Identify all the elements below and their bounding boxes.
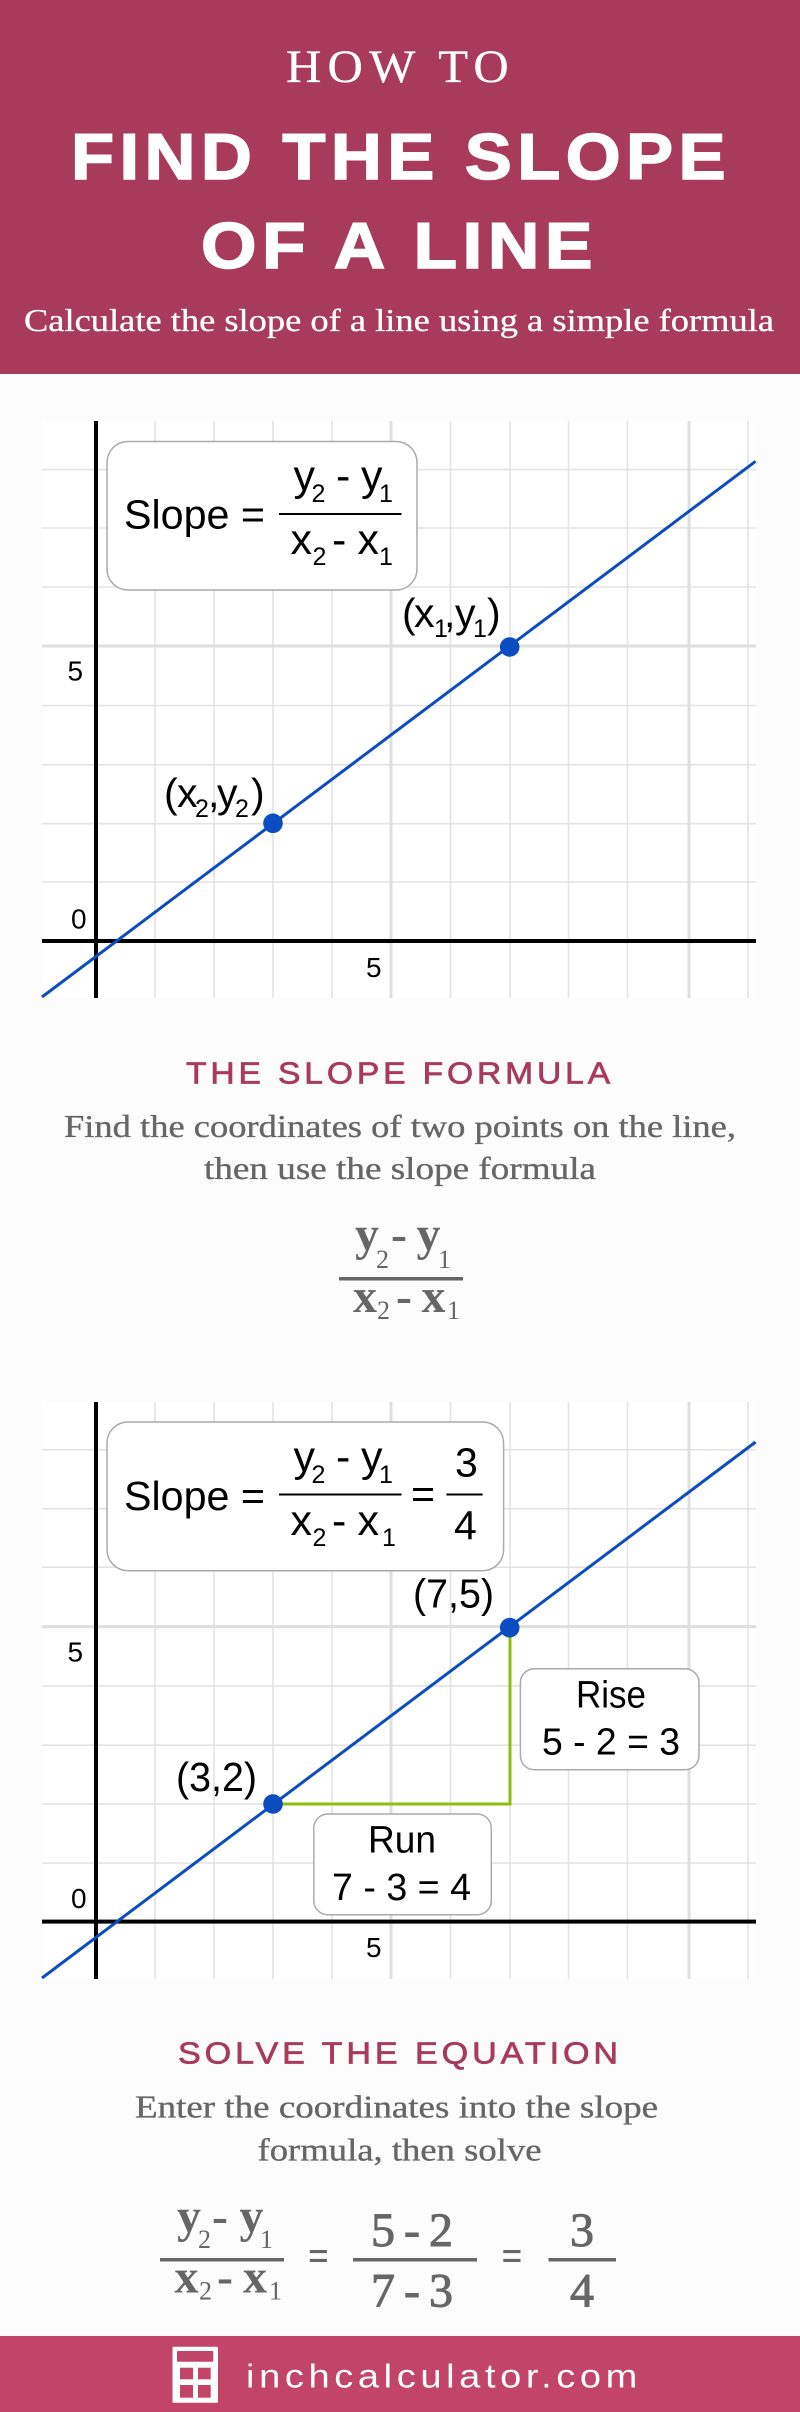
- numerator: -: [391, 1208, 407, 1261]
- result fraction: [446, 1440, 483, 1549]
- worked equation: [160, 2190, 616, 2318]
- axis label y five: 5: [68, 1636, 83, 1668]
- panel: header banner: [0, 0, 800, 374]
- denominator: -: [332, 516, 346, 564]
- y axis: [94, 421, 98, 998]
- formula fraction bar: [160, 2258, 284, 2262]
- description line two: then use the slope formula: [204, 1150, 596, 1186]
- point label x1 y1: (: [402, 590, 416, 636]
- fraction bar: [339, 1277, 463, 1280]
- heading: THE SLOPE FORMULA: [186, 1056, 614, 1090]
- blue line: [42, 461, 756, 997]
- panel: the slope formula: [64, 1056, 736, 1325]
- formula denominator: 1: [269, 2276, 282, 2305]
- x axis: [42, 939, 756, 943]
- formula denominator: 2: [199, 2276, 212, 2305]
- description line one: Enter the coordinates into the slope: [135, 2089, 658, 2125]
- numerator: 1: [438, 1245, 451, 1274]
- denominator: -: [396, 1270, 412, 1323]
- point x2 y2: [263, 814, 283, 833]
- numerator: y: [355, 1208, 379, 1261]
- point label x2 y2: (: [164, 770, 178, 816]
- point label three two: (3,2): [176, 1754, 257, 1800]
- numerator: 2: [312, 1461, 325, 1489]
- point label x1 y1: ,: [444, 590, 455, 636]
- callout: rise: 5 - 2 = 3: [542, 1721, 680, 1763]
- title: line two: OF A LINE: [201, 209, 598, 282]
- callout: run: Run: [368, 1820, 436, 1862]
- denominator: 1: [379, 543, 393, 571]
- denominator: 2: [312, 543, 326, 571]
- formula denominator: -: [217, 2250, 233, 2303]
- run and rise lines: [273, 1628, 510, 1804]
- values numerator: 5 - 2: [371, 2204, 453, 2257]
- point label x2 y2: ): [251, 770, 265, 816]
- numerator: 2: [376, 1245, 389, 1274]
- point label x2 y2: y: [217, 770, 238, 816]
- icon: calculator: [172, 2347, 218, 2403]
- title: line one: FIND THE SLOPE: [71, 120, 731, 193]
- point label x1 y1: x: [414, 590, 435, 636]
- point label x1 y1: ): [487, 590, 501, 636]
- result fraction: 4: [454, 1503, 477, 1549]
- website name: inchcalculator.com: [246, 2357, 642, 2394]
- formula numerator: y: [240, 2190, 264, 2243]
- denominator: x: [353, 1270, 377, 1323]
- numerator: y: [294, 452, 316, 500]
- fraction bar: [279, 513, 402, 515]
- numerator: y: [294, 1433, 316, 1481]
- callout: rise: Rise: [576, 1674, 646, 1716]
- axis label zero: 0: [71, 904, 87, 934]
- denominator: 1: [447, 1296, 460, 1325]
- numerator: y: [361, 1433, 383, 1481]
- result denominator: 4: [570, 2265, 594, 2318]
- denominator: x: [358, 516, 380, 564]
- blue line: [42, 1442, 756, 1978]
- slope label: Slope =: [124, 492, 265, 538]
- axis label x five: 5: [366, 952, 382, 983]
- y axis: [94, 1402, 98, 1979]
- numerator: -: [336, 1433, 350, 1481]
- formula numerator: 1: [260, 2225, 273, 2254]
- formula numerator: -: [212, 2190, 228, 2243]
- heading: how to: HOW TO: [286, 41, 515, 93]
- point label x2 y2: x: [177, 770, 198, 816]
- denominator: x: [422, 1270, 446, 1323]
- slope label: Slope =: [124, 1473, 265, 1519]
- panel: footer: [0, 2336, 800, 2412]
- equals sign two: =: [502, 2232, 522, 2281]
- result numerator: 3: [570, 2204, 594, 2257]
- point label seven five: (7,5): [413, 1570, 494, 1616]
- point three two: [263, 1794, 283, 1814]
- numerator: y: [416, 1208, 440, 1261]
- denominator: x: [290, 1497, 312, 1545]
- denominator: x: [290, 516, 312, 564]
- callout: run: [314, 1814, 491, 1915]
- axis label y five: 5: [68, 656, 83, 687]
- axis label x five: 5: [366, 1932, 382, 1963]
- panel: graph with worked example: [42, 1402, 756, 1979]
- callout: slope formula: [107, 442, 417, 590]
- panel: graph with slope formula: [42, 421, 756, 998]
- callout: rise: [520, 1669, 699, 1770]
- result fraction: 3: [455, 1440, 478, 1486]
- point seven five: [500, 1618, 520, 1637]
- axis label zero: 0: [71, 1883, 87, 1914]
- subtitle: Calculate the slope of a line using a simple formula: [24, 302, 774, 338]
- denominator: -: [332, 1497, 346, 1545]
- numerator: 2: [312, 480, 325, 508]
- formula numerator: y: [177, 2190, 201, 2243]
- fraction bar: [279, 1494, 402, 1496]
- numerator: 1: [379, 480, 393, 508]
- denominator: x: [358, 1497, 380, 1545]
- denominator: 1: [382, 1524, 396, 1552]
- point x1 y1: [500, 637, 520, 657]
- heading: SOLVE THE EQUATION: [178, 2036, 622, 2070]
- formula denominator: x: [243, 2250, 267, 2303]
- description line one: Find the coordinates of two points on the line,: [64, 1108, 736, 1144]
- denominator: 2: [377, 1296, 390, 1325]
- point label x2 y2: 2: [195, 795, 209, 823]
- numerator: y: [361, 452, 383, 500]
- formula: [339, 1208, 463, 1325]
- denominator: 2: [312, 1524, 326, 1552]
- point label x2 y2: ,: [208, 770, 219, 816]
- point label x1 y1: 1: [434, 615, 448, 643]
- description line two: formula, then solve: [258, 2132, 542, 2168]
- numerator: 1: [379, 1461, 393, 1489]
- values denominator: 7 - 3: [371, 2265, 453, 2318]
- equals sign one: =: [308, 2232, 329, 2281]
- callout: solved slope formula: [107, 1422, 504, 1571]
- values fraction bar: [353, 2258, 477, 2262]
- formula numerator: 2: [198, 2225, 211, 2254]
- numerator: -: [336, 452, 350, 500]
- result fraction bar: [548, 2258, 616, 2262]
- point label x2 y2: 2: [235, 795, 249, 823]
- x axis: [42, 1920, 756, 1924]
- point label x1 y1: y: [455, 590, 476, 636]
- equals sign: =: [411, 1471, 435, 1517]
- point label x1 y1: 1: [473, 615, 487, 643]
- formula denominator: x: [174, 2250, 198, 2303]
- callout: run: 7 - 3 = 4: [332, 1867, 471, 1909]
- panel: solve the equation: [135, 2036, 658, 2318]
